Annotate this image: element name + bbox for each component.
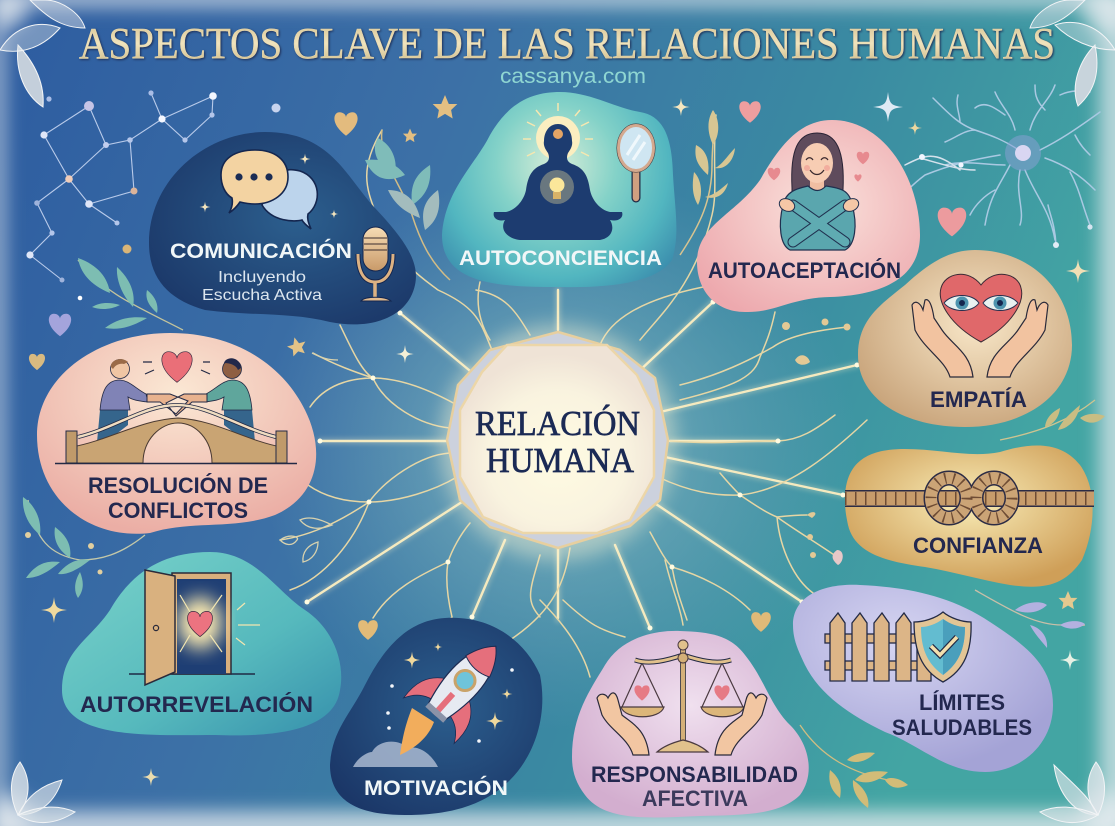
icon: mirror	[617, 124, 655, 198]
icon: small hearts	[768, 152, 869, 182]
panel: empatía: EMPATÍA	[930, 387, 1027, 412]
icon: sparkles	[200, 154, 338, 218]
icon: right open hand	[715, 693, 767, 755]
title: ASPECTOS CLAVE DE LAS RELACIONES HUMANAS	[79, 19, 1055, 68]
panel: autoconciencia: AUTOCONCIENCIA	[459, 247, 662, 270]
panel: límites saludables	[793, 585, 1053, 772]
panel: confianza: CONFIANZA	[913, 533, 1043, 558]
icon: cloud	[353, 742, 438, 767]
icon: left hand	[912, 300, 973, 377]
icon: heart with eyes	[940, 274, 1022, 342]
panel: autorrevelación: AUTORREVELACIÓN	[80, 692, 313, 717]
icon: hugging hands	[777, 196, 861, 214]
constellation decoration	[26, 90, 281, 300]
icon: mind spot	[553, 129, 563, 139]
panel: comunicación: COMUNICACIÓN	[170, 239, 352, 263]
branch: gold buds	[782, 318, 850, 565]
icon: right hand	[987, 300, 1048, 377]
center node: relación humana: HUMANA	[486, 441, 635, 480]
straight rays	[307, 290, 857, 628]
curved branches	[280, 115, 867, 677]
panel: límites saludables: SALUDABLES	[892, 715, 1032, 740]
center disc	[460, 345, 654, 533]
icon: wooden fence	[825, 613, 931, 681]
icon: door glow	[178, 597, 222, 649]
icon: eyes	[944, 296, 1018, 310]
panel: comunicación: Incluyendo	[218, 269, 306, 286]
icon: blue speech bubble	[262, 170, 317, 229]
icon: left person	[97, 359, 148, 442]
panel: resolución de conflictos: RESOLUCIÓN DE	[88, 473, 268, 498]
icon: light bulb	[540, 170, 574, 204]
icon: hugging body	[780, 186, 855, 250]
panel: autoaceptación	[697, 120, 920, 312]
neuron decoration	[890, 85, 1100, 248]
branch: lavender lower right	[975, 590, 1085, 648]
icon: shield with check	[914, 612, 971, 682]
outer glow	[440, 324, 676, 560]
icon: spark lines	[143, 362, 210, 374]
panel: confianza	[845, 445, 1094, 587]
icon: left open hand	[597, 693, 649, 755]
panel: autoaceptación: AUTOACEPTACIÓN	[708, 258, 901, 283]
icon: ground line	[55, 462, 297, 464]
icon: stone bridge	[72, 418, 281, 463]
glowing nodes	[304, 300, 860, 630]
panel: empatía	[858, 250, 1072, 427]
panel: resolución de conflictos	[37, 333, 316, 534]
icon: conflict heart	[162, 352, 192, 382]
center node: relación humana: RELACIÓN	[475, 403, 640, 443]
icon: door frame	[172, 573, 231, 674]
icon: floor	[129, 673, 255, 675]
panel: autoconciencia	[442, 92, 676, 287]
icons: decorative hearts and stars	[29, 92, 1090, 786]
center node: relación humana	[440, 324, 676, 560]
panel: motivación	[330, 618, 542, 815]
website: cassanya.com	[500, 65, 646, 88]
icon: balance scale	[621, 640, 744, 752]
panel: motivación: MOTIVACIÓN	[364, 776, 508, 800]
panel: responsabilidad afectiva: RESPONSABILIDAD	[591, 762, 798, 787]
icon: motivation stars	[386, 642, 514, 743]
icon: microphone	[358, 227, 393, 301]
icon: door heart	[188, 611, 212, 637]
icon: handshake	[147, 394, 207, 416]
icon: rope	[845, 490, 1094, 507]
icon: open door	[145, 570, 175, 685]
branch: gold bottom right	[800, 725, 908, 808]
branch: teal upper left	[78, 258, 183, 330]
icon: door interior	[177, 579, 226, 674]
panel: comunicación	[149, 132, 416, 324]
branch: gold top centre-right	[680, 110, 735, 255]
icon: meditating figure	[494, 124, 622, 240]
panel: comunicación: Escucha Activa	[202, 287, 322, 304]
panel: autorrevelación	[62, 552, 341, 735]
icon: bubble dots	[235, 173, 273, 181]
branch: outline leaves left	[280, 353, 338, 562]
icon: bridge railings	[66, 405, 287, 463]
icon: crossed arms	[793, 205, 845, 242]
branch: upper centre-left teal	[365, 130, 450, 280]
panel: responsabilidad afectiva	[572, 631, 809, 817]
panel: responsabilidad afectiva: AFECTIVA	[642, 786, 748, 811]
branch: teal lower left	[23, 497, 145, 598]
central glow	[258, 170, 858, 730]
icon: halo and rays	[523, 103, 593, 160]
icon: rocket	[403, 623, 521, 744]
glow rays	[307, 260, 857, 628]
icon: knot	[931, 478, 1012, 518]
panel: límites saludables: LÍMITES	[919, 690, 1005, 715]
connector lines	[280, 115, 867, 677]
panel: resolución de conflictos: CONFLICTOS	[108, 498, 248, 523]
icon: rays	[180, 595, 260, 652]
icon: flame	[400, 708, 434, 755]
icon: hair	[792, 133, 843, 195]
icon: door knob	[153, 625, 159, 631]
icon: tan speech bubble	[221, 150, 288, 213]
back octagon	[447, 332, 668, 548]
icon: face	[801, 143, 833, 192]
branch: gold lower right of empatía	[1000, 400, 1105, 440]
icon: right person	[204, 358, 255, 442]
